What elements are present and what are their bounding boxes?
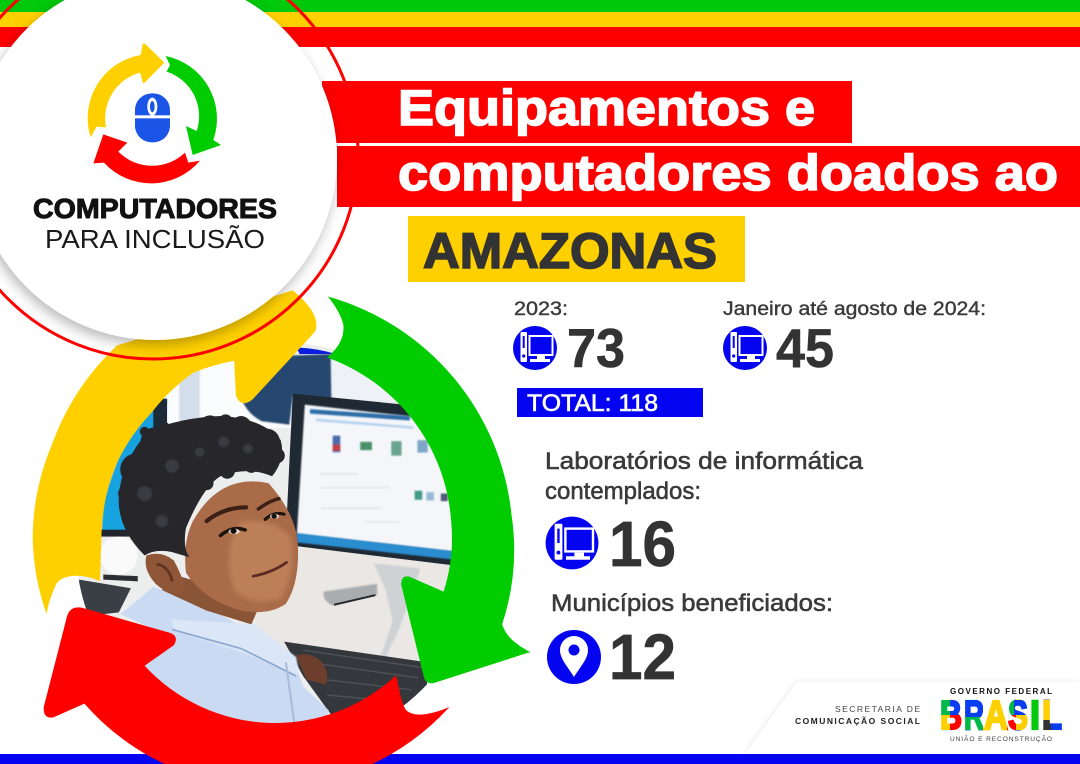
eyes, brows and smile <box>207 499 287 576</box>
total bar <box>517 388 703 417</box>
stat: 2023 <box>513 299 625 379</box>
brasil wordmark: R <box>964 692 984 738</box>
footer: secretaria: SECRETARIA DE <box>835 704 920 714</box>
icon: computer <box>513 326 557 370</box>
bottom blue band <box>0 754 1080 764</box>
footer: secretaria <box>795 704 920 726</box>
footer panel <box>745 682 1080 754</box>
top stripes <box>0 0 1080 47</box>
logo arrows <box>88 44 221 183</box>
total bar: TOTAL: 118 <box>527 390 658 417</box>
stat: municípios: 12 <box>609 621 676 693</box>
stat: janeiro a agosto 2024 <box>723 299 986 379</box>
monitor stand and base <box>374 563 420 657</box>
brasil wordmark: L <box>1042 692 1062 738</box>
title: Equipamentos e <box>398 80 815 136</box>
icon: computer <box>723 326 767 370</box>
logo wordmark: PARA INCLUSÃO <box>45 224 265 254</box>
arrow: yellow <box>33 290 316 614</box>
footer: governo federal logo: GOVERNO FEDERAL <box>950 687 1052 696</box>
brasil wordmark: S <box>1008 692 1028 738</box>
footer: governo federal logo: UNIÃO E RECONSTRUÇÃO <box>950 734 1052 743</box>
photo: boy at computer <box>78 344 452 723</box>
stat: laboratórios: Laboratórios de informática <box>545 448 864 475</box>
neck <box>162 576 262 624</box>
footer: governo federal logo <box>940 687 1062 743</box>
logo mouse icon <box>135 93 170 142</box>
title bar line 2 <box>337 146 1080 207</box>
right monitor <box>287 394 452 565</box>
brasil wordmark: B <box>940 692 962 738</box>
icon: map pin <box>547 630 601 684</box>
logo wordmark: COMPUTADORES <box>33 193 277 224</box>
title bar line 1 <box>322 81 852 143</box>
hair <box>118 414 285 557</box>
arrow: red <box>44 607 449 764</box>
stat: 2023: 73 <box>567 317 625 379</box>
stat: laboratórios: 16 <box>609 508 676 580</box>
keyboard <box>284 642 427 714</box>
state highlight: AMAZONAS <box>423 223 717 279</box>
desk <box>255 549 450 661</box>
arrow: green <box>327 297 530 683</box>
brasil wordmark: I <box>1030 692 1040 738</box>
footer: secretaria: COMUNICAÇÃO SOCIAL <box>795 716 920 726</box>
red ring <box>0 0 358 359</box>
shirt <box>121 587 329 731</box>
stat: 2023: 2023: <box>514 299 568 320</box>
stat: municípios <box>547 590 833 693</box>
logo wordmark <box>33 193 277 254</box>
logo circle <box>0 0 337 340</box>
ear <box>146 554 182 590</box>
hand <box>296 654 327 685</box>
stat: janeiro a agosto 2024: 45 <box>776 317 834 379</box>
arrows ring around the photo <box>33 290 530 764</box>
face <box>185 481 298 612</box>
stat: laboratórios <box>545 448 864 580</box>
stat: laboratórios: contemplados: <box>545 478 701 505</box>
stat: janeiro a agosto 2024: Janeiro até agosto de 2024: <box>723 299 986 320</box>
title <box>398 80 1058 201</box>
brasil wordmark <box>940 692 1062 738</box>
icon: computer <box>546 517 598 569</box>
stat: municípios: Municípios beneficiados: <box>551 590 833 617</box>
brasil wordmark: A <box>984 692 1008 738</box>
title: computadores doados ao <box>398 145 1058 201</box>
